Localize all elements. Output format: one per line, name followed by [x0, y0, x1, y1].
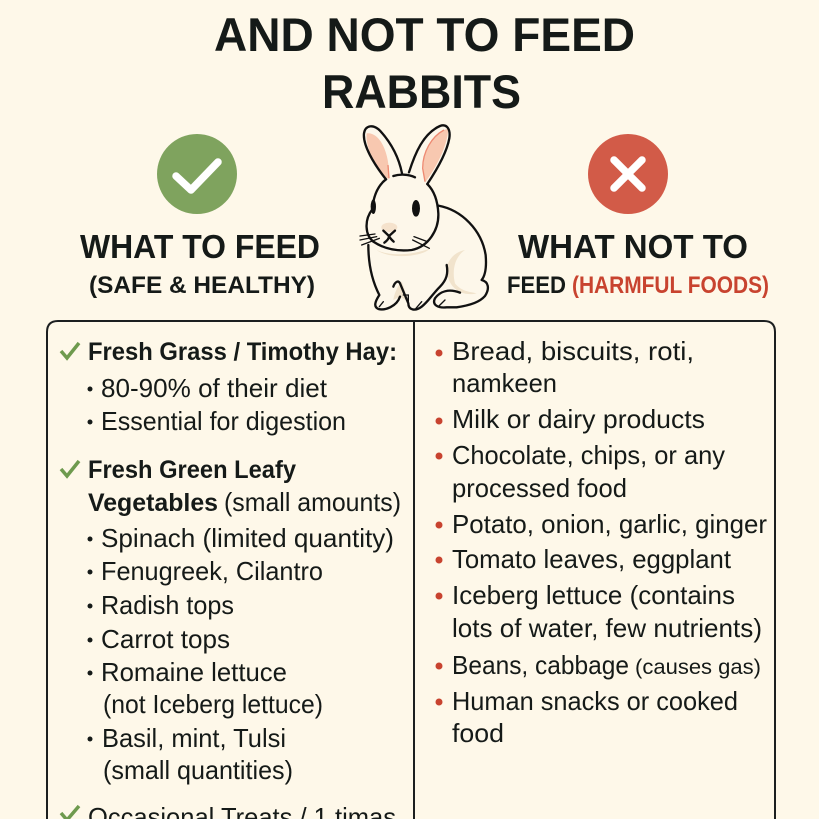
section: fresh grass: Fresh Grass / Timothy Hay: [88, 338, 397, 366]
hay details [88, 373, 346, 436]
hay details: 80-90% of their diet [101, 373, 328, 403]
vegetable list: (small quantities) [103, 755, 293, 785]
vegetable list: Spinach (limited quantity) [101, 523, 394, 553]
title [214, 8, 635, 118]
panel: what not to feed list: Potato, onion, garlic, ginger [452, 509, 767, 539]
vegetable list: Romaine lettuce [101, 657, 287, 687]
vegetable list [88, 523, 394, 785]
section: leafy vegetables: Fresh Green Leafy [88, 456, 296, 484]
icon: green check [157, 134, 237, 214]
vegetable list: Basil, mint, Tulsi [102, 723, 286, 753]
panel: what not to feed list: Beans, cabbage [452, 650, 629, 680]
panel: what not to feed list: food [452, 718, 504, 748]
title: AND NOT TO FEED [214, 8, 635, 61]
vegetable list: Carrot tops [101, 624, 230, 654]
hay details: Essential for digestion [101, 406, 346, 436]
panel: what not to feed list: processed food [452, 473, 627, 503]
panel: what not to feed list: Human snacks or cooked [452, 686, 738, 716]
heading: what to feed: WHAT TO FEED [80, 228, 320, 265]
section: leafy vegetables: (small amounts) [224, 487, 401, 517]
vegetable list: Radish tops [101, 590, 234, 620]
panel: what not to feed list: namkeen [452, 368, 557, 398]
panel: what not to feed list: Milk or dairy products [452, 404, 705, 434]
panel: what not to feed list: Iceberg lettuce (contains [452, 580, 735, 610]
heading: what to feed [80, 228, 320, 299]
panel: what not to feed list: Chocolate, chips, or any [452, 440, 725, 470]
panel: what not to feed list: Tomato leaves, eggplant [452, 544, 732, 574]
table panel [47, 321, 775, 819]
vegetable list: Fenugreek, Cilantro [101, 556, 323, 586]
panel: what not to feed list: Bread, biscuits, roti, [452, 336, 694, 366]
icon: red cross [588, 134, 668, 214]
heading: what not to feed: FEED [507, 272, 566, 299]
illustration: rabbit [360, 125, 488, 310]
panel: what not to feed list [436, 336, 767, 748]
vegetable list: (not Iceberg lettuce) [103, 689, 323, 719]
heading: what not to feed [507, 228, 769, 299]
panel: what not to feed list: lots of water, few nutrients) [452, 613, 762, 643]
panel: what to feed list [61, 338, 401, 819]
title: RABBITS [322, 65, 521, 118]
section: leafy vegetables: Vegetables [88, 489, 218, 517]
heading: what to feed: (SAFE & HEALTHY) [89, 272, 315, 299]
section: leafy vegetables [61, 456, 401, 517]
heading: what not to feed: (HARMFUL FOODS) [572, 272, 769, 299]
heading: what not to feed: WHAT NOT TO [518, 228, 748, 265]
panel: what not to feed list: (causes gas) [635, 656, 761, 679]
